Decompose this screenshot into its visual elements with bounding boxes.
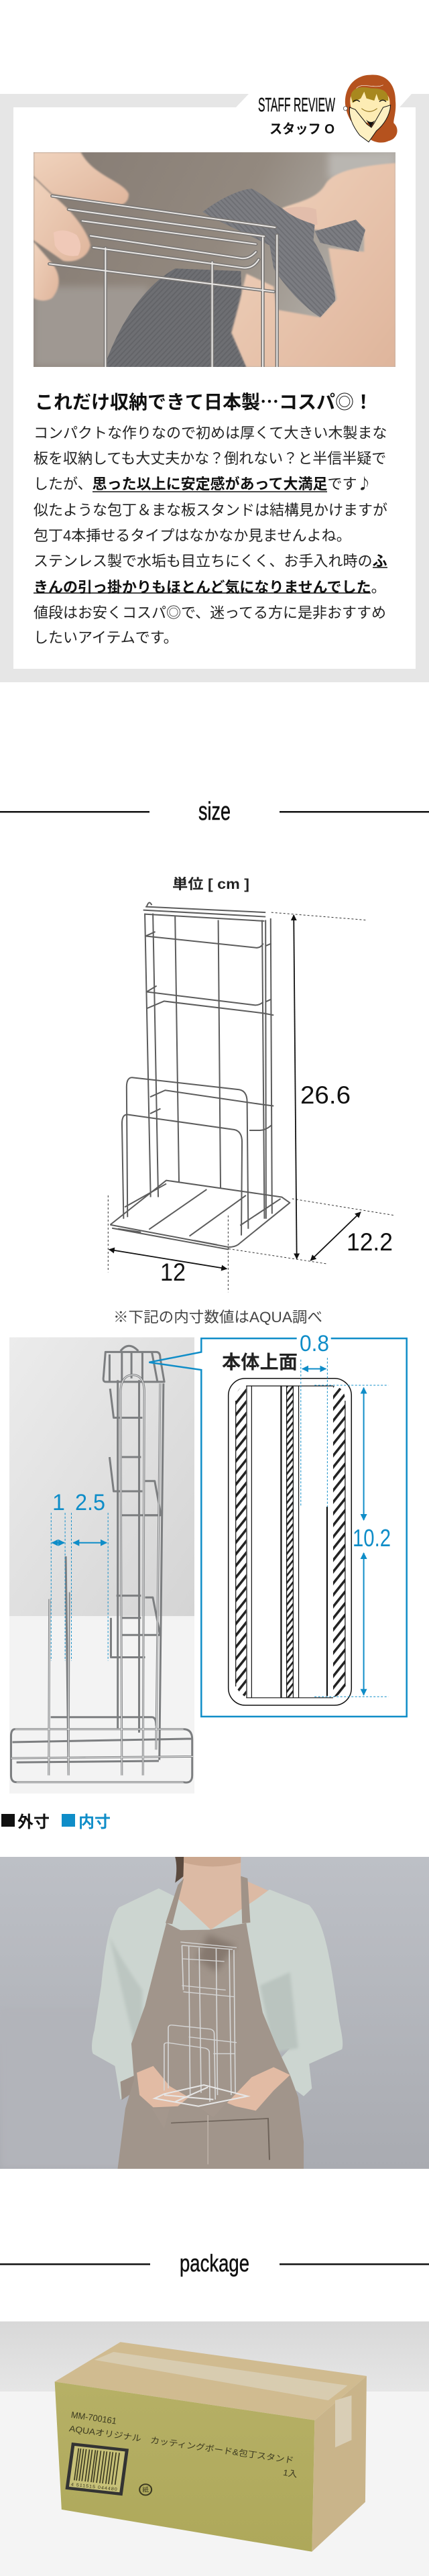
photo: cardboard package: MM-700161 <box>70 2410 117 2426</box>
dashed guides <box>51 1358 388 1697</box>
heading: package: package <box>180 2249 249 2277</box>
inner dimension 1: 1 <box>52 1490 65 1515</box>
note on inner dimensions: ※下記の内寸数値はAQUA調べ <box>113 1309 322 1326</box>
review body text: ステンレス製で水垢も目立ちにくく、お手入れ時のふ <box>34 553 387 570</box>
review body text: コンパクトな作りなので初めは厚くて大きい木製まな <box>34 425 387 441</box>
recycle mark: 紙 <box>142 2486 149 2493</box>
inner dimension 0.8: 0.8 <box>300 1331 329 1356</box>
legend: 内寸 <box>78 1813 111 1831</box>
inner dimension arrows <box>52 1368 364 1695</box>
review body text: 似たような包丁＆まな板スタンドは結構見かけますが <box>34 502 387 519</box>
review body text: 板を収納しても大丈夫かな？倒れない？と半信半疑で <box>34 450 386 467</box>
review body text: したいアイテムです。 <box>34 629 178 646</box>
rack line drawing <box>108 902 395 1292</box>
review heading: これだけ収納できて日本製…コスパ◎！ <box>35 388 373 415</box>
icon: smiling staff avatar <box>343 75 397 143</box>
barcode: 4 511515 044480 <box>70 2483 117 2492</box>
heading: size: size <box>198 798 231 826</box>
unit label: 単位 [ cm ] <box>172 877 249 892</box>
staff name: スタッフ O <box>269 121 334 137</box>
size diagram: rack with outer dimensions <box>108 877 395 1292</box>
dimension: height: 26.6 <box>300 1081 351 1109</box>
box top <box>55 2342 367 2420</box>
photo: person in apron holding rack <box>0 1857 429 2169</box>
inner dimension 2.5: 2.5 <box>75 1490 105 1515</box>
panel: staff review <box>0 75 429 682</box>
photo: cardboard package <box>0 2321 429 2576</box>
callout frame <box>149 1338 407 1717</box>
review body text: 包丁4本挿せるタイプはなかなか見ませんよね。 <box>34 527 351 544</box>
inner dimension 10.2: 10.2 <box>353 1524 391 1552</box>
dashed extension lines <box>108 912 395 1292</box>
dimension: depth: 12.2 <box>347 1228 393 1256</box>
box side <box>312 2376 367 2552</box>
barcode <box>65 2443 129 2496</box>
legend <box>1 1813 111 1831</box>
recycle mark <box>139 2484 151 2495</box>
legend: 外寸 <box>17 1813 50 1831</box>
top view drawing <box>229 1379 351 1705</box>
dimension: width: 12 <box>160 1258 186 1286</box>
review body text <box>34 425 387 646</box>
box front <box>55 2381 314 2552</box>
photo: cardboard package: 1入 <box>282 2468 298 2479</box>
photo: hands wiping rack with cloth <box>34 152 395 367</box>
dimension arrows <box>109 915 361 1269</box>
review body text: したが、思った以上に安定感があって大満足です♪ <box>34 472 371 494</box>
callout: inner dimension diagrams <box>51 1338 407 1717</box>
photo: side view with inner dimensions <box>9 1338 194 1794</box>
top view label: 本体上面 <box>222 1352 298 1373</box>
review body text: きんの引っ掛かりもほとんど気になりませんでした。 <box>34 579 386 596</box>
photo: cardboard package: AQUAオリジナル カッティングボード&包丁スタンド <box>68 2424 294 2465</box>
staff review label: STAFF REVIEW <box>258 95 335 116</box>
review body text: 値段はお安くコスパ◎で、迷ってる方に是非おすすめ <box>34 604 386 621</box>
